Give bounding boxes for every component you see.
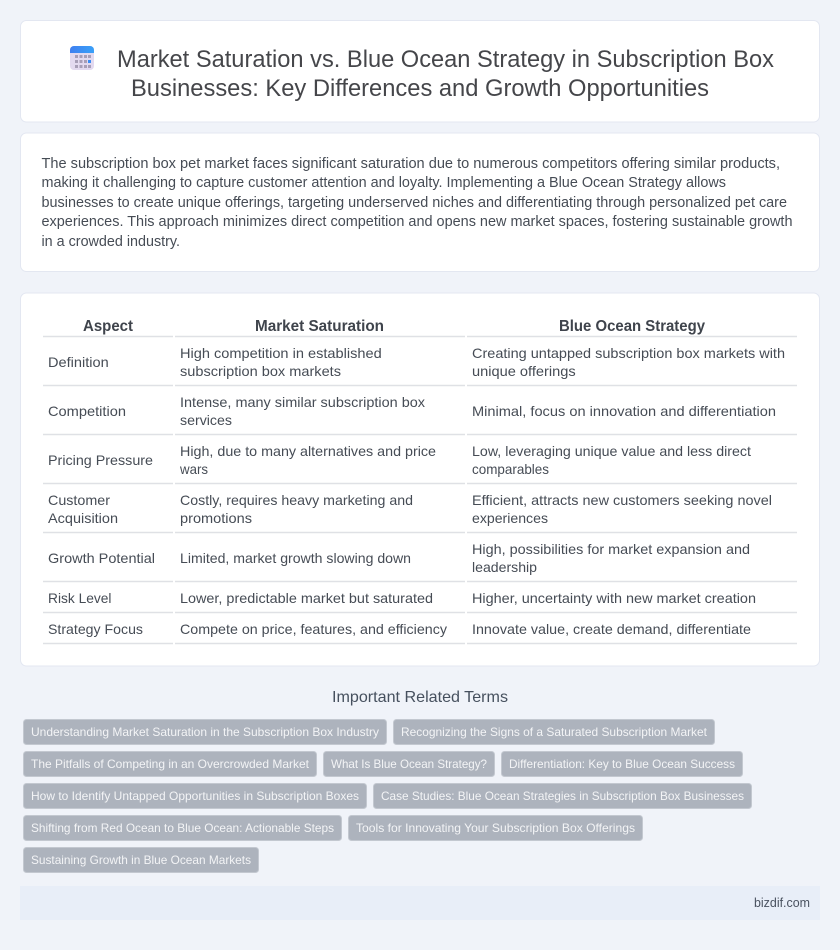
table header row: Market Saturation bbox=[255, 318, 384, 335]
tag bbox=[374, 784, 752, 808]
summary text: making it challenging to capture customer attention and loyalty. Implementing a Blue Ocean Strategy allows bbox=[42, 175, 726, 191]
row: risk level: Risk Level bbox=[48, 590, 112, 606]
heading: important related terms: Important Related Terms bbox=[332, 689, 508, 706]
row: definition bbox=[43, 345, 797, 386]
row: competition: Minimal, focus on innovation and differentiation bbox=[472, 403, 776, 419]
tag: Understanding Market Saturation in the Subscription Box Industry bbox=[31, 725, 379, 739]
title: Market Saturation vs. Blue Ocean Strategy in Subscription Box bbox=[117, 46, 774, 73]
row: pricing pressure: wars bbox=[179, 461, 208, 477]
row: growth potential: Growth Potential bbox=[48, 550, 155, 566]
row: growth potential: leadership bbox=[472, 559, 537, 575]
title: Businesses: Key Differences and Growth Opportunities bbox=[131, 75, 709, 102]
table header row: Blue Ocean Strategy bbox=[559, 318, 705, 335]
row: competition: Intense, many similar subscription box bbox=[180, 394, 425, 410]
tag bbox=[394, 720, 714, 744]
tag: Case Studies: Blue Ocean Strategies in Subscription Box Businesses bbox=[381, 789, 744, 803]
tag bbox=[24, 752, 316, 776]
tag bbox=[24, 784, 366, 808]
footer bar bbox=[20, 886, 820, 920]
panel: summary paragraph bbox=[20, 133, 820, 272]
panel: comparison table bbox=[20, 293, 820, 666]
row: pricing pressure: Low, leveraging unique value and less direct bbox=[472, 443, 751, 459]
tag bbox=[24, 816, 342, 840]
row: customer acquisition: Efficient, attracts new customers seeking novel bbox=[472, 492, 772, 508]
row: growth potential bbox=[43, 541, 797, 582]
tag: Recognizing the Signs of a Saturated Subscription Market bbox=[401, 725, 708, 739]
row: competition: services bbox=[180, 412, 232, 428]
tag bbox=[24, 848, 258, 872]
row: pricing pressure: comparables bbox=[472, 461, 549, 477]
row: customer acquisition: promotions bbox=[180, 510, 252, 526]
tag bbox=[24, 720, 386, 744]
row: pricing pressure: High, due to many alternatives and price bbox=[180, 443, 436, 459]
tag: Sustaining Growth in Blue Ocean Markets bbox=[31, 853, 251, 867]
row: definition: Creating untapped subscription box markets with bbox=[472, 345, 785, 361]
tag: The Pitfalls of Competing in an Overcrowded Market bbox=[31, 757, 310, 771]
row: definition: unique offerings bbox=[472, 363, 576, 379]
row: customer acquisition: experiences bbox=[472, 510, 548, 526]
row: definition: Definition bbox=[48, 354, 109, 370]
row: customer acquisition: Costly, requires heavy marketing and bbox=[180, 492, 413, 508]
summary text bbox=[42, 156, 793, 250]
row: customer acquisition: Acquisition bbox=[48, 510, 118, 526]
row: risk level bbox=[43, 590, 797, 612]
row: growth potential: High, possibilities for market expansion and bbox=[472, 541, 750, 557]
row: competition: Competition bbox=[48, 403, 126, 419]
row: pricing pressure bbox=[43, 443, 797, 484]
tag bbox=[324, 752, 494, 776]
row: risk level: Lower, predictable market but saturated bbox=[180, 590, 433, 606]
related terms tags bbox=[24, 720, 752, 872]
tag: Shifting from Red Ocean to Blue Ocean: Actionable Steps bbox=[31, 821, 334, 835]
footer bar: bizdif.com bbox=[754, 896, 810, 910]
row: strategy focus: Compete on price, features, and efficiency bbox=[180, 621, 447, 637]
icon: calendar bbox=[70, 46, 94, 70]
table header row bbox=[43, 318, 797, 336]
row: pricing pressure: Pricing Pressure bbox=[48, 452, 153, 468]
title bbox=[117, 46, 774, 102]
row: competition bbox=[43, 394, 797, 434]
table header row: Aspect bbox=[83, 318, 133, 335]
row: risk level: Higher, uncertainty with new market creation bbox=[472, 590, 756, 606]
tag bbox=[348, 816, 642, 840]
tag: Differentiation: Key to Blue Ocean Success bbox=[509, 757, 735, 771]
row: growth potential: Limited, market growth slowing down bbox=[180, 550, 411, 566]
tag: How to Identify Untapped Opportunities in Subscription Boxes bbox=[31, 789, 359, 803]
tag: What Is Blue Ocean Strategy? bbox=[331, 757, 487, 771]
row: strategy focus: Innovate value, create demand, differentiate bbox=[472, 621, 751, 637]
row: definition: High competition in established bbox=[180, 345, 382, 361]
tag: Tools for Innovating Your Subscription Box Offerings bbox=[356, 821, 635, 835]
panel: header bbox=[20, 20, 820, 122]
summary text: in a crowded industry. bbox=[42, 234, 180, 250]
summary text: experiences. This approach minimizes direct competition and opens new market spaces, fostering sustainable growth bbox=[42, 214, 793, 230]
summary text: The subscription box pet market faces significant saturation due to numerous competitors offering similar products, bbox=[42, 156, 780, 172]
tag bbox=[502, 752, 742, 776]
row: customer acquisition bbox=[43, 492, 797, 532]
row: definition: subscription box markets bbox=[180, 363, 341, 379]
summary text: businesses to create unique offerings, targeting underserved niches and differentiating through personalized pet care bbox=[42, 195, 787, 211]
row: customer acquisition: Customer bbox=[48, 492, 110, 508]
row: strategy focus: Strategy Focus bbox=[48, 621, 143, 637]
row: strategy focus bbox=[43, 621, 797, 644]
